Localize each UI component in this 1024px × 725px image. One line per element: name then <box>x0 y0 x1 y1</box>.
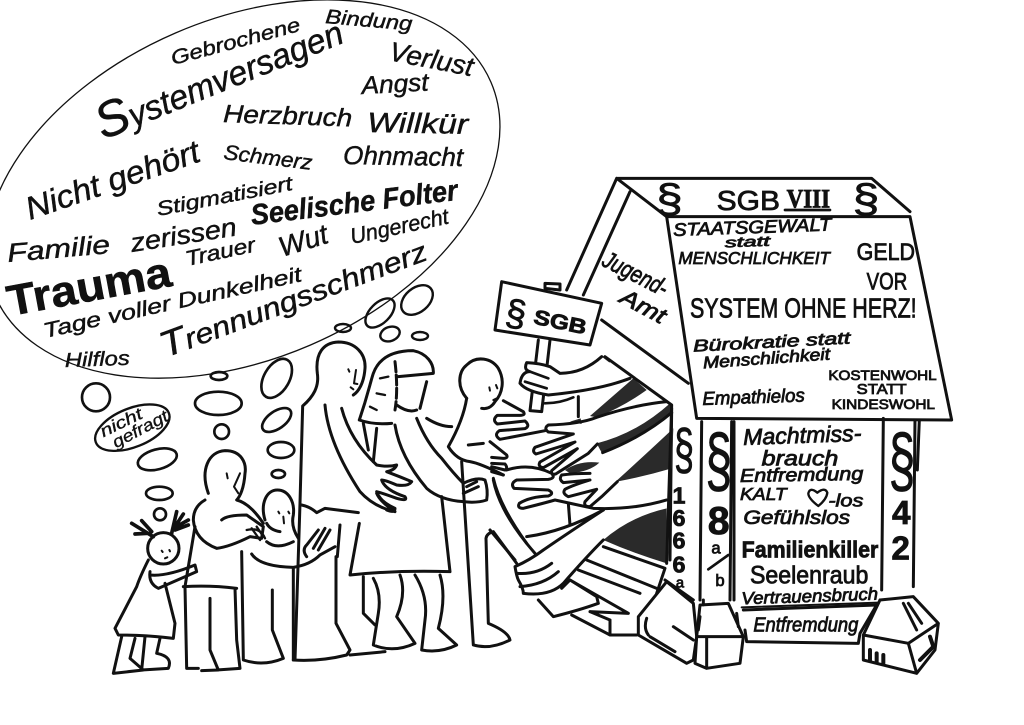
word: Trauma: Trauma <box>3 248 176 326</box>
left column paragraph: a <box>676 575 685 591</box>
bubble: nicht gefragt <box>89 395 176 460</box>
word: Systemversagen: Systemversagen <box>86 0 350 150</box>
central text list: Gefühlslos <box>743 508 850 529</box>
sign with SGB: § <box>503 291 529 335</box>
roof text SGB VIII: § <box>853 177 879 221</box>
bubble: nicht gefragt: gefragt <box>109 406 173 452</box>
icon: heart <box>808 490 827 506</box>
right column paragraph: 4 <box>892 495 911 532</box>
word: Angst: Angst <box>359 68 430 100</box>
cloud outline <box>0 0 558 452</box>
text: Staatsgewalt statt Menschlichkeit: STAATSGEWALT <box>673 214 834 240</box>
word: Herzbruch: Herzbruch <box>223 100 353 132</box>
reaching arm two <box>534 402 667 474</box>
roof and side wall <box>567 178 910 600</box>
family figures with thought bubbles <box>82 342 527 673</box>
thought bubbles <box>82 354 298 520</box>
side text Jugend-Amt <box>597 246 673 330</box>
right column paragraph: 2 <box>891 530 910 567</box>
center column paragraph: a <box>711 538 721 557</box>
text: Kostenwohl statt Kindeswohl: KOSTENWOHL <box>828 367 937 383</box>
roof text SGB VIII: SGB <box>717 185 780 216</box>
central text list: Machtmiss- <box>743 420 862 450</box>
child hands <box>490 401 545 475</box>
roof text SGB VIII: VIII <box>787 184 830 214</box>
thought cloud with words <box>0 0 558 452</box>
front sign panel: VOR <box>867 268 907 295</box>
left column paragraph: 1 <box>673 482 686 508</box>
column bases <box>638 582 938 673</box>
left column paragraph <box>673 418 694 591</box>
word: Tage voller Dunkelheit: Tage voller Dunkelheit <box>41 263 305 343</box>
reaching arm three <box>560 413 672 507</box>
bubble: nicht gefragt: nicht <box>97 403 147 441</box>
text: Geld vor: GELD <box>857 239 915 266</box>
child being pulled away <box>448 359 527 647</box>
left column paragraph: 6 <box>673 528 686 554</box>
little girl with pigtails <box>113 512 197 673</box>
left column paragraph: § <box>674 418 694 481</box>
small boy figure <box>242 490 335 663</box>
right column paragraph: § <box>889 419 915 501</box>
sign with SGB: SGB <box>532 306 589 339</box>
center column paragraph: § <box>705 419 732 501</box>
Jugendamt building <box>567 177 952 673</box>
front sign panel: Menschlichkeit <box>702 344 832 372</box>
word: Willkür: Willkür <box>367 107 470 140</box>
left column paragraph: 6 <box>673 505 686 531</box>
word: Bindung: Bindung <box>325 6 413 36</box>
word: Nicht gehört: Nicht gehört <box>21 133 205 227</box>
word: Verlust: Verlust <box>387 36 478 82</box>
medium sibling figure <box>183 451 265 671</box>
word: Schmerz: Schmerz <box>222 141 314 175</box>
left column paragraph: 6 <box>673 552 686 578</box>
tall adult figure <box>293 342 412 660</box>
side text Jugend-Amt: Amt <box>614 282 673 330</box>
sign with SGB <box>495 282 602 345</box>
front sign panel: statt <box>725 233 772 250</box>
word: Seelische Folter: Seelische Folter <box>249 175 461 232</box>
stairs <box>568 357 672 635</box>
foot <box>538 580 598 617</box>
central text list: Seelenraub <box>750 562 868 589</box>
right column paragraph <box>889 419 915 567</box>
central text list: brauch <box>762 446 838 470</box>
arm holding sign <box>520 357 630 403</box>
roof text SGB VIII: § <box>656 177 683 221</box>
center column paragraph <box>705 419 732 590</box>
woman figure with hair <box>350 351 487 651</box>
side text Jugend-Amt: Jugend- <box>597 246 673 302</box>
text: Entfremdung base: Entfremdung <box>753 615 858 637</box>
text: Bürokratie statt Menschlichkeit: Bürokratie statt <box>693 328 853 356</box>
word: Gebrochene: Gebrochene <box>169 14 303 70</box>
central text list: Familienkiller <box>742 536 878 562</box>
word: Trennungsschmerz: Trennungsschmerz <box>153 228 432 365</box>
word: Ohnmacht: Ohnmacht <box>343 140 465 172</box>
center column paragraph: 8 <box>708 499 730 543</box>
word: Trauer: Trauer <box>183 233 259 271</box>
dark doorway stripes <box>565 355 673 563</box>
front sign panel: STATT <box>857 382 907 398</box>
central text list: KALT <box>740 484 789 504</box>
word: zerissen: zerissen <box>127 212 239 258</box>
roof text SGB VIII <box>656 177 879 221</box>
center column paragraph: b <box>715 571 725 590</box>
front sign panel <box>667 214 952 420</box>
columns <box>700 418 919 600</box>
word: Ungerecht: Ungerecht <box>348 203 452 249</box>
word: Wut: Wut <box>275 218 333 263</box>
text: Empathielos: Empathielos <box>702 384 805 409</box>
front sign panel: MENSCHLICHKEIT <box>678 248 832 268</box>
central text list <box>740 420 878 608</box>
sign pole <box>530 340 550 412</box>
central text list: Entfremdung <box>740 463 864 486</box>
central text list: -los <box>828 491 863 511</box>
central text list: Vertrauensbruch <box>741 584 878 608</box>
grabbing arm on leg <box>490 480 603 594</box>
word: Familie: Familie <box>6 229 111 268</box>
word: Hilflos: Hilflos <box>64 348 130 372</box>
front sign panel: KINDESWOHL <box>832 396 935 412</box>
word: Stigmatisiert: Stigmatisiert <box>155 173 296 221</box>
reaching arms, stairs and dark doorway <box>490 340 673 635</box>
reaching arm four <box>507 467 667 509</box>
text: System ohne Herz: SYSTEM OHNE HERZ! <box>690 292 917 323</box>
thought bubbles upper right <box>335 279 439 344</box>
